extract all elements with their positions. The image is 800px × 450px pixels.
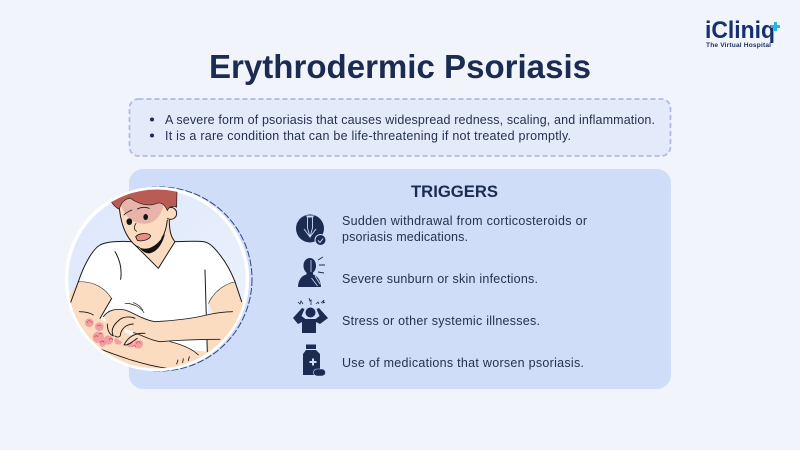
trigger 2: sunburn: Severe sunburn or skin infections.: [342, 272, 538, 286]
bullet 2: It is a rare condition that can be life-threatening if not treated promptly.: [165, 129, 571, 143]
icon: sunburned person: [298, 257, 325, 287]
lower arm: [73, 310, 198, 368]
title: Erythrodermic Psoriasis: [209, 48, 591, 85]
rash: [85, 318, 143, 349]
trigger 1: corticosteroid withdrawal: psoriasis medications.: [342, 230, 468, 244]
panel: definition: [130, 99, 670, 156]
trigger 4: medications: [303, 344, 584, 376]
trigger 1: corticosteroid withdrawal: Sudden withdrawal from corticosteroids or: [342, 214, 587, 228]
trigger 3: stress: Stress or other systemic illnesses.: [342, 314, 540, 328]
head: [120, 205, 168, 245]
bullet 1: A severe form of psoriasis that causes widespread redness, scaling, and inflammation.: [165, 113, 655, 127]
icon: pill bottle: [303, 344, 326, 376]
jaw shadow: [139, 233, 165, 253]
illustration: man scratching rash: [65, 186, 252, 372]
neck: [136, 220, 174, 268]
trigger 4: medications: Use of medications that worsen psoriasis.: [342, 356, 584, 370]
icon: stressed person: [293, 298, 328, 333]
heading: triggers: TRIGGERS: [411, 182, 498, 201]
ear: [165, 207, 177, 219]
logo: iCliniq: iCliniq: [705, 17, 775, 44]
motion lines: [125, 303, 144, 313]
trigger 3: stress: [293, 298, 540, 333]
upper arms: [69, 282, 244, 368]
shirt: [78, 241, 235, 352]
icon: syringe badge: [296, 214, 326, 246]
trigger 1: corticosteroid withdrawal: [296, 214, 587, 246]
hair: [111, 189, 177, 211]
trigger 2: sunburn: [298, 257, 538, 287]
eyes: [126, 218, 132, 225]
logo: iCliniq: The Virtual Hospital: [706, 42, 771, 49]
mouth: [136, 234, 151, 241]
top forearm and hand: [104, 308, 242, 344]
panel: triggers: [129, 169, 671, 389]
